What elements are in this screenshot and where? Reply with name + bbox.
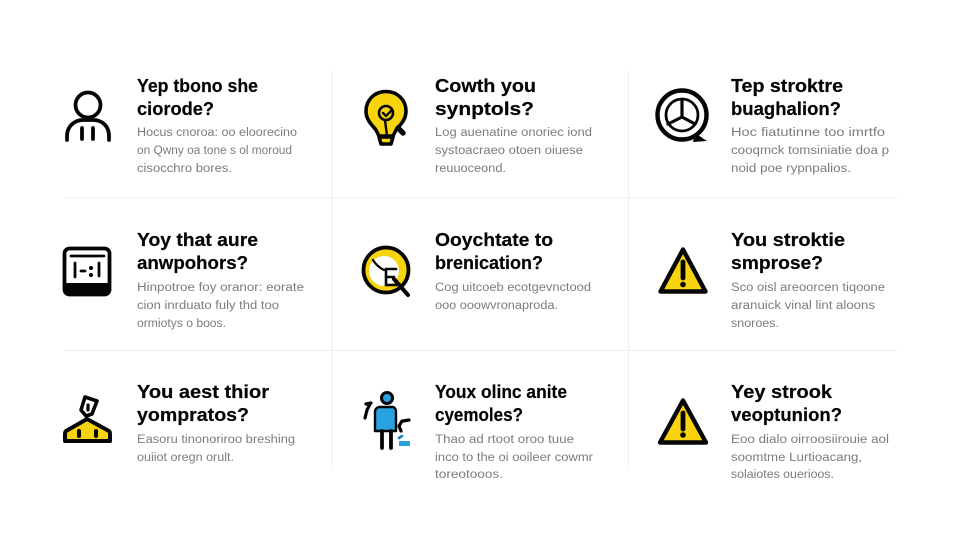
heading: Tep stroktre xyxy=(731,76,843,96)
text block: cisocchro bores. xyxy=(137,163,232,175)
text block: ouiiot oregn orult. xyxy=(137,452,234,464)
heading: anwpohors? xyxy=(137,253,248,273)
icon: person xyxy=(67,92,109,140)
text block: ooo ooowvronaproda. xyxy=(435,300,558,312)
heading: Yey strook xyxy=(731,382,833,402)
heading xyxy=(435,382,567,425)
icon: light bulb xyxy=(366,92,406,144)
text block xyxy=(731,127,889,175)
icon: standing person xyxy=(365,392,410,448)
text block: Eoo dialo oirroosiirouie aol xyxy=(731,434,889,446)
panel: row 3 column 3 xyxy=(660,382,889,481)
text block: Hoc fiatutinne too imrtfo xyxy=(731,127,885,139)
text block xyxy=(435,434,593,481)
text block: cooqmck tomsiniatie doa p xyxy=(731,145,889,157)
text block: Thao ad rtoot oroo tuue xyxy=(435,434,574,446)
heading: You stroktie xyxy=(731,230,845,250)
text block: Log auenatine onoriec iond xyxy=(435,127,592,139)
text block: Hocus cnoroa: oo eloorecino xyxy=(137,127,297,139)
panel: row 3 column 2 xyxy=(365,382,593,481)
text block xyxy=(435,282,591,312)
heading: smprose? xyxy=(731,253,823,273)
heading: veoptunion? xyxy=(731,405,842,425)
text block: ormiotys o boos. xyxy=(137,318,226,330)
text block: inco to the oi ooileer cowmr xyxy=(435,452,593,464)
heading xyxy=(731,230,845,273)
panel: row 3 column 1 xyxy=(65,382,295,464)
heading xyxy=(137,76,258,119)
heading: brenication? xyxy=(435,253,543,273)
text block xyxy=(435,127,592,175)
panel: row 2 column 2 xyxy=(364,230,591,312)
icon: magnifier xyxy=(364,248,408,295)
text block xyxy=(731,282,885,330)
panel: row 1 column 3 xyxy=(658,76,889,175)
text block: noid poe rypnpalios. xyxy=(731,163,851,175)
heading: Cowth you xyxy=(435,76,536,96)
text block: reuuoceond. xyxy=(435,163,506,175)
heading: Yep tbono she xyxy=(137,76,258,96)
heading xyxy=(435,76,536,119)
text block: snoroes. xyxy=(731,318,779,330)
text block: Cog uitcoeb ecotgevnctood xyxy=(435,282,591,294)
heading: Ooychtate to xyxy=(435,230,553,250)
icon: warning triangle xyxy=(660,400,706,442)
text block: aranuick vinal lint aloons xyxy=(731,300,875,312)
heading: Yoy that aure xyxy=(137,230,258,250)
heading: yompratos? xyxy=(137,405,249,425)
icon: clock bubble xyxy=(658,90,707,142)
heading: You aest thior xyxy=(137,382,269,402)
heading: synptols? xyxy=(435,99,534,119)
heading xyxy=(731,76,843,119)
icon: warning triangle xyxy=(660,250,706,292)
text block: on Qwny oa tone s ol moroud xyxy=(137,145,292,157)
text block xyxy=(731,434,889,481)
heading xyxy=(137,382,269,425)
panel: row 1 column 1 xyxy=(67,76,297,175)
text block: Easoru tinonoriroo breshing xyxy=(137,434,295,446)
text block: Sco oisl areoorcen tiqoone xyxy=(731,282,885,294)
heading: cyemoles? xyxy=(435,405,523,425)
heading xyxy=(137,230,258,273)
heading xyxy=(435,230,553,273)
heading xyxy=(731,382,842,425)
text block: systoacraeo otoen oiuese xyxy=(435,145,583,157)
text block: toreotooos. xyxy=(435,469,503,481)
text block: cion inrduato fuly thd too xyxy=(137,300,279,312)
text block xyxy=(137,434,295,464)
text block xyxy=(137,127,297,175)
icon: calendar panel xyxy=(63,248,111,296)
panel: row 2 column 1 xyxy=(63,230,304,330)
panel: row 2 column 3 xyxy=(660,230,885,330)
text block: soomtme Lurtioacang, xyxy=(731,452,862,464)
icon: house tag xyxy=(65,397,110,441)
text block: Hinpotroe foy oranor: eorate xyxy=(137,282,304,294)
heading: Youx olinc anite xyxy=(435,382,567,402)
panel: row 1 column 2 xyxy=(366,76,592,175)
text block: solaiotes ouerioos. xyxy=(731,469,834,481)
heading: buaghalion? xyxy=(731,99,841,119)
heading: ciorode? xyxy=(137,99,214,119)
text block xyxy=(137,282,304,330)
